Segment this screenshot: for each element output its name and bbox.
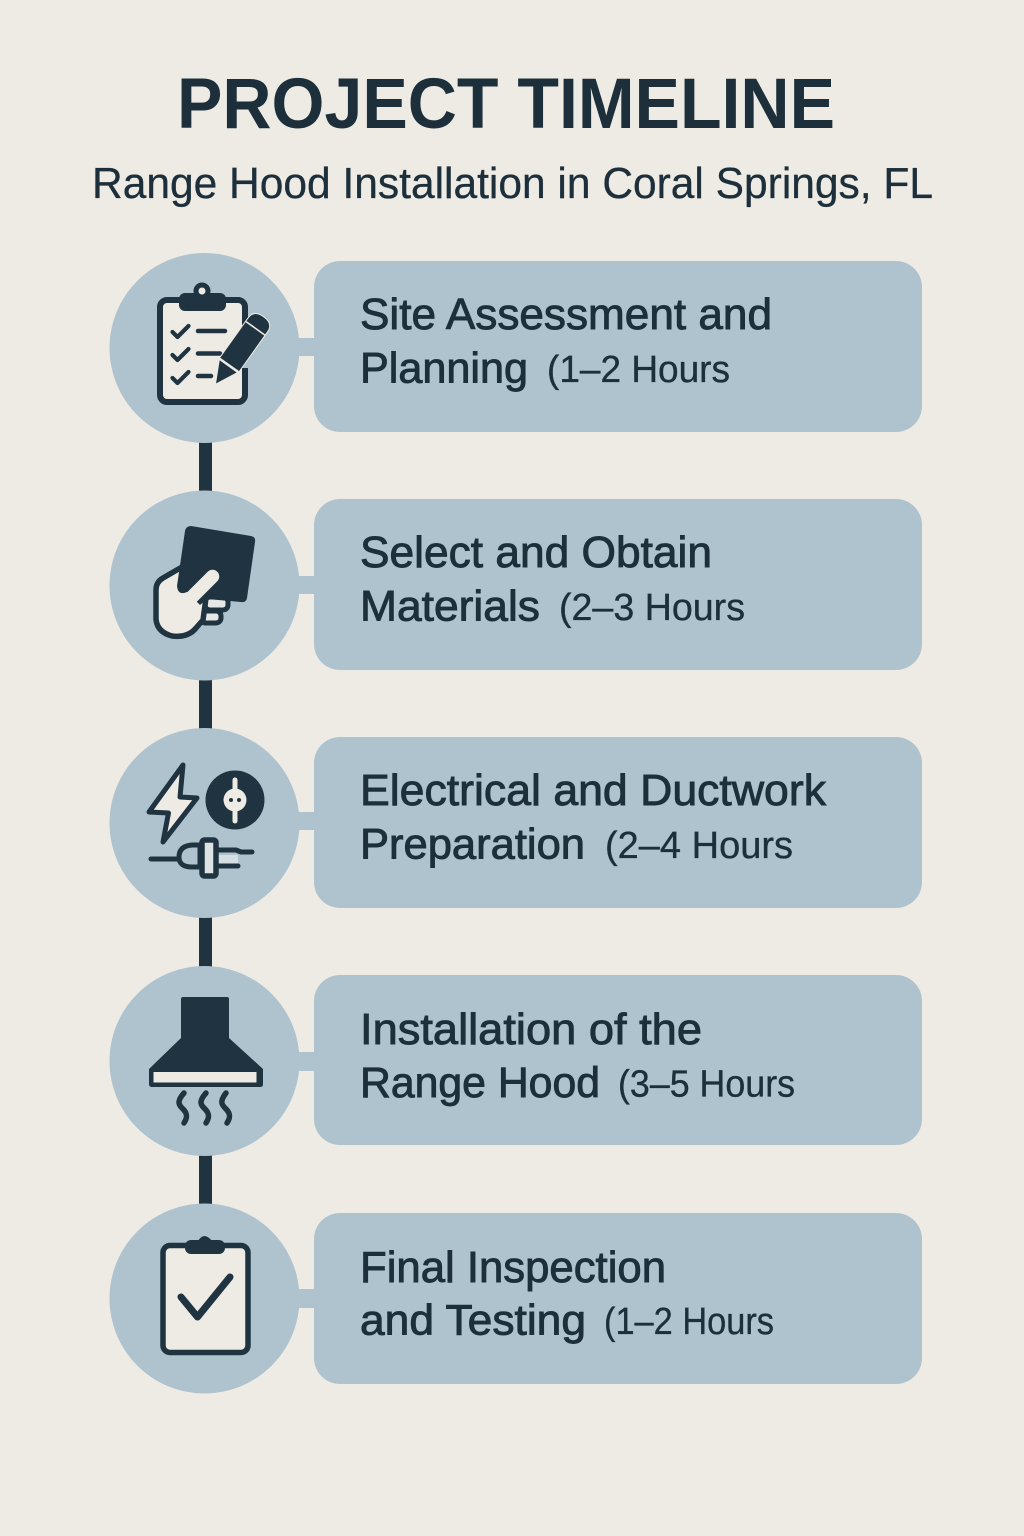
title: PROJECT TIMELINE xyxy=(177,65,835,144)
icon: clipboard with pencil xyxy=(160,285,273,402)
step 5: final inspection xyxy=(110,1204,922,1394)
link bar xyxy=(295,1289,320,1308)
icon: clipboard with check mark xyxy=(163,1236,248,1352)
step 3: electrical and ductwork xyxy=(110,728,922,918)
icon: hand holding sample xyxy=(156,526,255,636)
step text: (3–5 Hours xyxy=(618,1064,795,1106)
link bar xyxy=(295,576,320,594)
step 4: installation xyxy=(110,966,922,1156)
step 1: site assessment xyxy=(110,253,922,443)
link bar xyxy=(295,812,320,830)
step circle xyxy=(110,490,300,680)
step circle xyxy=(110,1204,300,1394)
card xyxy=(314,975,922,1145)
step text: Select and Obtain xyxy=(360,528,712,577)
link bar xyxy=(295,1052,320,1071)
connector: step 2 to 3 xyxy=(199,676,212,732)
card xyxy=(314,737,922,908)
step text xyxy=(360,766,827,868)
step text: Materials xyxy=(360,582,540,630)
connector: step 3 to 4 xyxy=(199,914,212,970)
step text: Installation of the xyxy=(360,1005,702,1054)
step text: (2–3 Hours xyxy=(559,587,745,629)
card xyxy=(314,261,922,432)
step text: (1–2 Hours xyxy=(547,349,730,391)
step text: (2–4 Hours xyxy=(605,825,793,867)
step circle xyxy=(110,966,300,1156)
step 2: materials xyxy=(110,490,922,680)
step text xyxy=(360,1243,774,1344)
card xyxy=(314,499,922,670)
icon: range hood with steam xyxy=(149,997,263,1123)
connector: step 1 to 2 xyxy=(199,438,212,494)
step text: Electrical and Ductwork xyxy=(360,766,827,815)
link bar xyxy=(295,338,320,356)
step text: Range Hood xyxy=(360,1059,600,1107)
step text: Final Inspection xyxy=(360,1243,666,1292)
step circle xyxy=(110,253,300,443)
step text xyxy=(360,1005,795,1107)
step text: and Testing xyxy=(360,1296,586,1344)
step text: Planning xyxy=(360,344,528,392)
step circle xyxy=(110,728,300,918)
icon: bolt, socket and plug xyxy=(149,765,264,876)
step text: (1–2 Hours xyxy=(604,1301,774,1343)
step text: Preparation xyxy=(360,820,585,868)
card xyxy=(314,1213,922,1384)
subtitle: Range Hood Installation in Coral Springs, FL xyxy=(92,160,933,208)
step text xyxy=(360,290,772,392)
connector: step 4 to 5 xyxy=(199,1152,212,1208)
step text: Site Assessment and xyxy=(360,290,772,339)
step text xyxy=(360,528,745,630)
